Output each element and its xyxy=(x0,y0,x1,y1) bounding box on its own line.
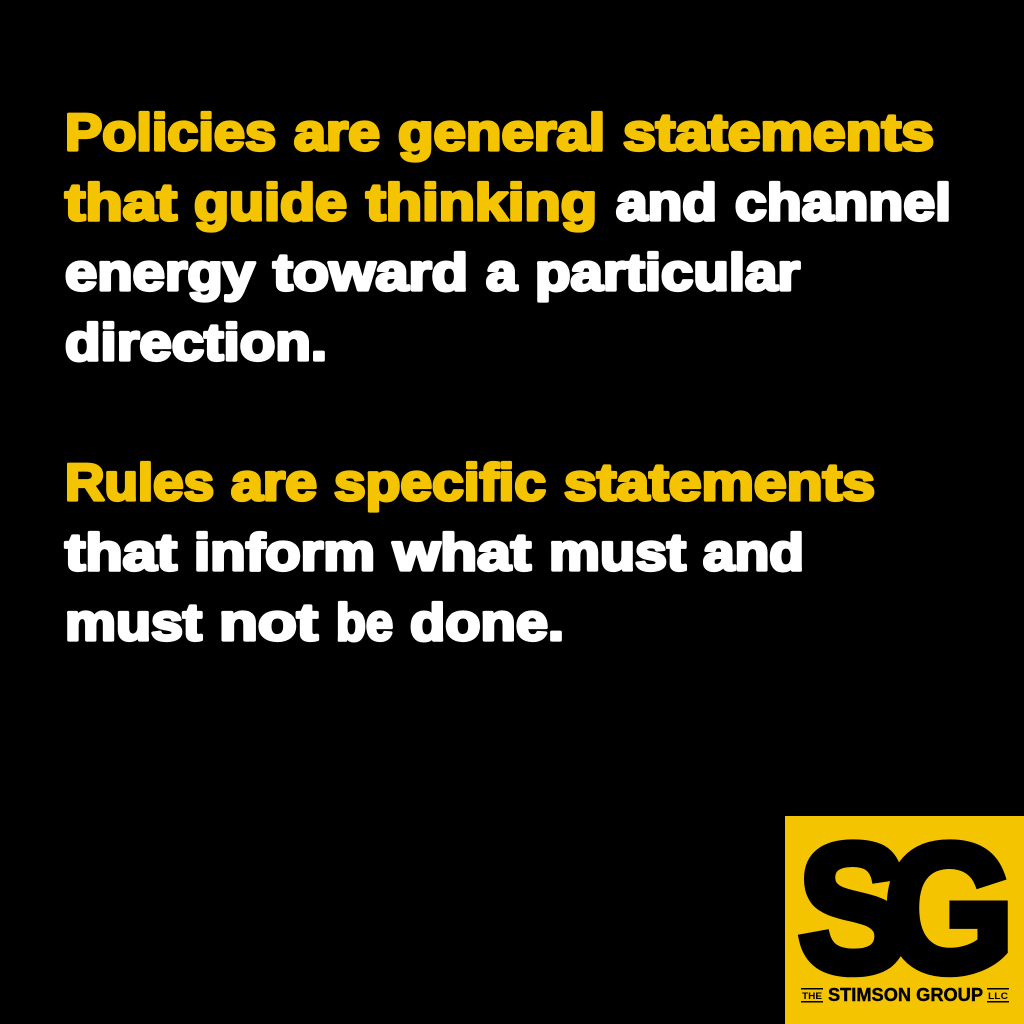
text block: policies definition: general xyxy=(398,104,605,162)
logo wordmark: The Stimson Group LLC: STIMSON GROUP xyxy=(828,985,983,1005)
text block: policies definition: are xyxy=(294,104,380,162)
text block: rules definition: statements xyxy=(564,454,875,512)
logo monogram: SG xyxy=(798,806,1014,1010)
text block: rules definition: done. xyxy=(410,594,564,652)
text block: policies definition xyxy=(65,104,951,372)
text block: policies definition: and xyxy=(616,174,717,232)
text block: rules definition: and xyxy=(703,524,804,582)
text block: policies definition: statements xyxy=(623,104,934,162)
text block: rules definition: are xyxy=(231,454,317,512)
text block: policies definition: direction. xyxy=(65,314,327,372)
text block: policies definition: energy xyxy=(65,244,255,302)
text block: rules definition xyxy=(65,454,875,652)
text block: rules definition: must xyxy=(65,594,202,652)
text block: rules definition: specific xyxy=(334,454,546,512)
logo wordmark: The Stimson Group LLC: THE xyxy=(802,991,822,1001)
text block: policies definition: toward xyxy=(273,244,468,302)
text block: policies definition: channel xyxy=(735,174,951,232)
logo wordmark: The Stimson Group LLC: LLC xyxy=(988,991,1009,1001)
logo monogram: SG: S xyxy=(798,806,908,1010)
text block: policies definition: that xyxy=(65,174,177,232)
text block: policies definition: thinking xyxy=(366,174,597,232)
text block: policies definition: Policies xyxy=(65,104,276,162)
text block: policies definition: guide xyxy=(194,174,347,232)
text block: rules definition: inform xyxy=(194,524,375,582)
text block: rules definition: Rules xyxy=(65,454,214,512)
text block: rules definition: what xyxy=(392,524,531,582)
logo monogram: SG: G xyxy=(884,806,1014,1010)
text block: policies definition: a xyxy=(486,244,518,302)
text block: policies definition: particular xyxy=(535,244,800,302)
text block: rules definition: that xyxy=(65,524,177,582)
text block: rules definition: be xyxy=(336,594,393,652)
text block: rules definition: not xyxy=(219,594,318,652)
logo panel: The Stimson Group xyxy=(785,806,1024,1024)
text block: rules definition: must xyxy=(549,524,686,582)
